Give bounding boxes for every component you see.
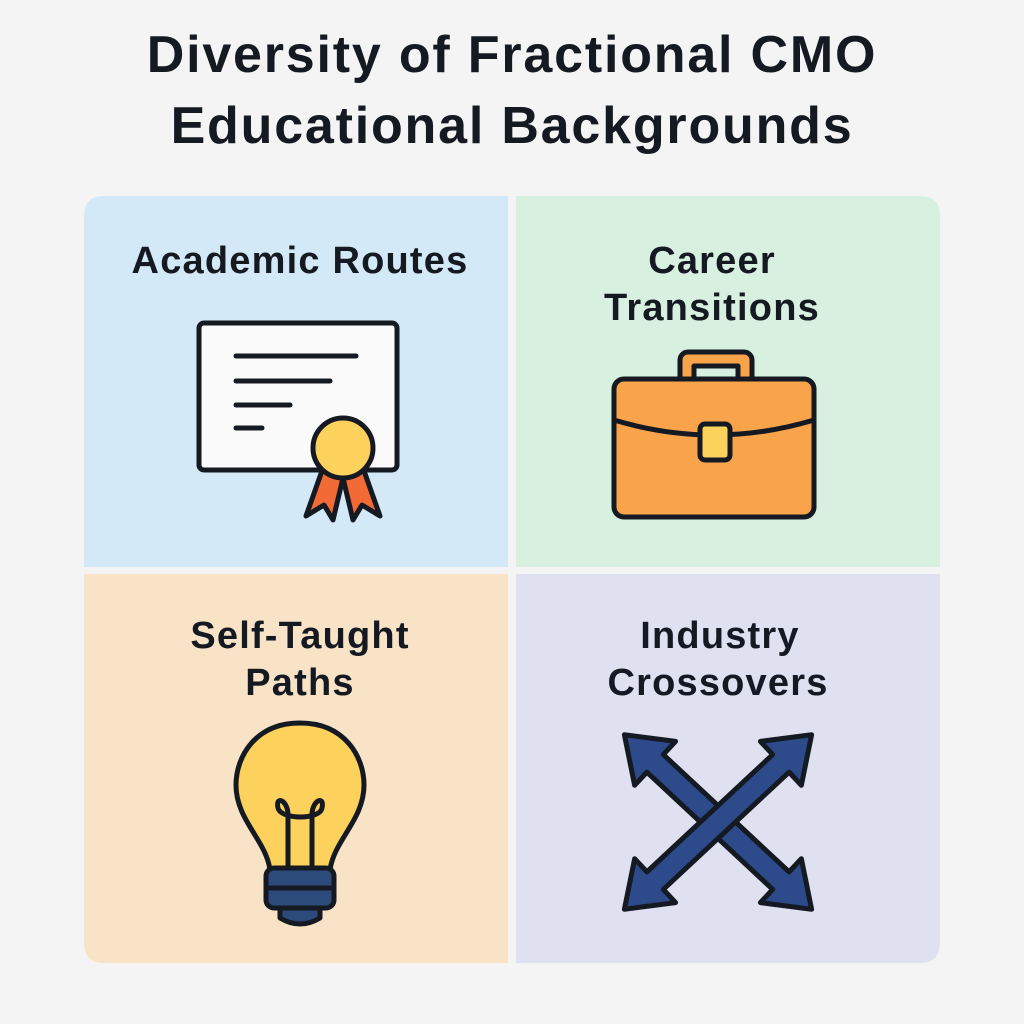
panel: career transitions: Transitions — [604, 287, 820, 329]
heading: career transitions: Career — [648, 240, 776, 282]
panel: career transitions — [516, 196, 940, 567]
panel: academic routes — [84, 196, 508, 567]
icon: light bulb — [236, 723, 364, 924]
title: Educational Backgrounds — [171, 97, 853, 155]
panel: self-taught paths: Paths — [245, 662, 355, 704]
heading: academic routes: Academic Routes — [132, 240, 468, 282]
panel: industry crossovers — [516, 574, 940, 963]
panel: self-taught paths — [84, 574, 508, 963]
title: Diversity of Fractional CMO — [147, 26, 877, 84]
panel: industry crossovers: Crossovers — [607, 662, 829, 704]
icon: certificate — [199, 323, 397, 520]
heading: self-taught paths: Self-Taught — [190, 615, 410, 657]
title — [147, 26, 877, 155]
icon: briefcase — [614, 352, 814, 517]
heading: industry crossovers: Industry — [640, 615, 800, 657]
icon: crossing arrows — [604, 713, 832, 931]
